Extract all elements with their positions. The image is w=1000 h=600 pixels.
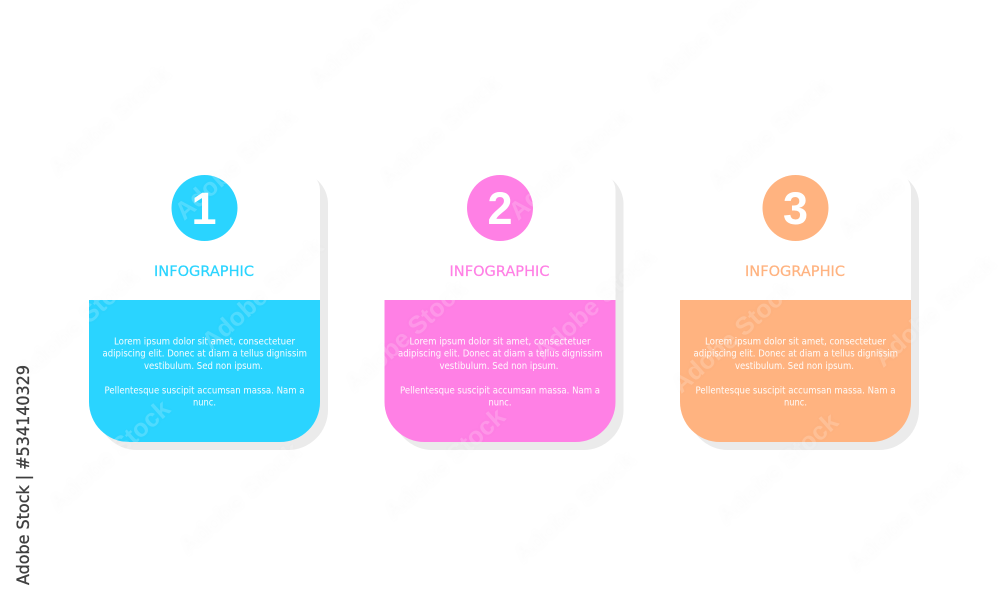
card body 1 (89, 300, 320, 442)
panel: step 2 card (384, 172, 624, 450)
watermark pattern: Adobe Stock (509, 445, 641, 569)
number badge 2: 2 (487, 183, 513, 234)
watermark pattern: Adobe Stock (834, 120, 966, 244)
number badge 1 (172, 175, 238, 241)
watermark pattern: Adobe Stock (712, 407, 844, 531)
description 1: adipiscing elit. Donec at diam a tellus dignissim (102, 349, 307, 360)
watermark pattern: Adobe Stock (340, 274, 472, 398)
card shadow 3 (688, 172, 919, 450)
description 3: adipiscing elit. Donec at diam a tellus dignissim (694, 349, 898, 360)
heading 2: INFOGRAPHIC (450, 264, 550, 280)
watermark pattern: Adobe Stock (842, 454, 974, 578)
description 1: vestibulum. Sed non ipsum. (144, 361, 263, 372)
panel: step 1 card (89, 172, 328, 450)
number badge 3 (762, 175, 828, 241)
watermark pattern: Adobe Stock (704, 72, 836, 196)
number badge 1: 1 (191, 183, 217, 234)
watermark pattern: Adobe Stock (529, 242, 661, 366)
heading 3: INFOGRAPHIC (745, 264, 845, 280)
card body 2 (384, 300, 616, 442)
panel: step 3 card (680, 172, 919, 450)
description 2: Pellentesque suscipit accumsan massa. Nam a (400, 386, 600, 396)
watermark pattern: Adobe Stock (869, 249, 1000, 373)
number badge 2 (467, 175, 533, 241)
watermark pattern: Adobe Stock (44, 59, 176, 183)
watermark pattern: Adobe Stock (170, 102, 302, 226)
card top 3 (680, 172, 911, 300)
description 1: Lorem ipsum dolor sit amet, consectetuer (114, 336, 296, 348)
description 2 (398, 336, 602, 409)
card body 3 (680, 300, 911, 442)
watermark pattern: Adobe Stock (197, 232, 329, 356)
description 2: vestibulum. Sed non ipsum. (440, 361, 558, 372)
watermark pattern: Adobe Stock (12, 262, 144, 386)
card shadow 1 (97, 172, 328, 450)
description 2: adipiscing elit. Donec at diam a tellus dignissim (398, 349, 602, 360)
card shadow 2 (392, 172, 624, 450)
card top 2 (384, 172, 616, 300)
description 3: Lorem ipsum dolor sit amet, consectetuer (705, 336, 887, 348)
description 2: Lorem ipsum dolor sit amet, consectetuer (410, 336, 591, 348)
watermark pattern: Adobe Stock (667, 275, 799, 399)
description 1: nunc. (193, 398, 216, 409)
number badge 3: 3 (783, 183, 808, 234)
watermark pattern: Adobe Stock (44, 394, 176, 518)
side credit text: Adobe Stock | #534140329 (14, 365, 34, 585)
description 3: nunc. (784, 398, 807, 409)
description 1: Pellentesque suscipit accumsan massa. Nam a (104, 386, 304, 396)
heading 1: INFOGRAPHIC (154, 264, 254, 280)
description 3: Pellentesque suscipit accumsan massa. Nam a (696, 386, 896, 396)
watermark pattern: Adobe Stock (374, 69, 506, 193)
description 3: vestibulum. Sed non ipsum. (735, 361, 854, 372)
watermark pattern: Adobe Stock (504, 102, 636, 226)
watermark pattern: Adobe Stock (174, 437, 306, 561)
description 3 (694, 336, 898, 409)
description 1 (102, 336, 307, 409)
card top 1 (89, 172, 320, 300)
description 2: nunc. (488, 398, 512, 409)
watermark pattern: Adobe Stock (379, 402, 511, 526)
